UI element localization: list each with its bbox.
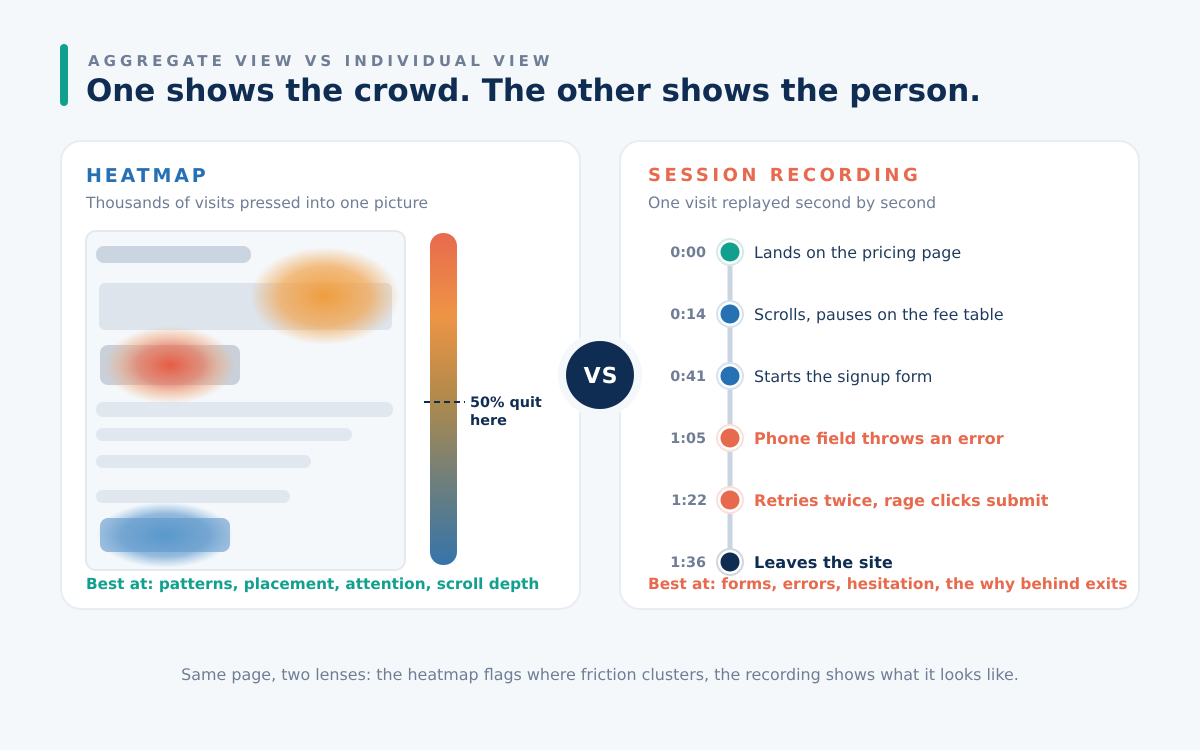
step 1:05: [670, 425, 1004, 451]
panel: heatmap: [61, 141, 580, 609]
heatmap best at: Best at: patterns, placement, attention, scroll depth: [86, 575, 539, 593]
step 1:36: Leaves the site: [754, 553, 893, 572]
50 percent label: 50% quit: [470, 395, 542, 411]
page mockup with heat blobs: [86, 231, 405, 570]
heatmap heading: HEATMAP: [86, 165, 209, 187]
step 0:14: Scrolls, pauses on the fee table: [754, 305, 1004, 324]
VS badge: VS: [584, 364, 618, 389]
header accent bar: [60, 44, 68, 106]
eyebrow heading: AGGREGATE VIEW VS INDIVIDUAL VIEW: [88, 52, 554, 70]
step 0:00: 0:00: [670, 245, 706, 261]
panel: session recording: [620, 141, 1139, 609]
hotspot: red: [104, 326, 236, 404]
title: One shows the crowd. The other shows the person.: [86, 73, 981, 109]
hotspot: orange: [250, 247, 400, 345]
session subtitle: One visit replayed second by second: [648, 193, 936, 212]
step 1:22: [671, 487, 1049, 513]
VS badge: [558, 333, 642, 417]
50 percent label: here: [470, 413, 507, 429]
step 1:22: 1:22: [671, 493, 707, 509]
session heading: SESSION RECORDING: [648, 165, 921, 186]
step 1:36: [670, 549, 893, 575]
step 1:05: Phone field throws an error: [754, 429, 1004, 448]
scroll depth bar: [430, 233, 457, 565]
step 0:41: 0:41: [670, 369, 706, 385]
step 0:00: Lands on the pricing page: [754, 243, 961, 262]
heatmap subtitle: Thousands of visits pressed into one picture: [85, 194, 428, 212]
step 0:14: 0:14: [670, 307, 706, 323]
step 0:00: [670, 239, 961, 265]
step 0:41: Starts the signup form: [754, 367, 932, 386]
step 1:36: 1:36: [670, 555, 706, 571]
50 percent marker line: [424, 401, 465, 403]
session best at: Best at: forms, errors, hesitation, the why behind exits: [648, 575, 1128, 593]
step 0:14: [670, 301, 1004, 327]
step 1:05: 1:05: [670, 431, 706, 447]
step 1:22: Retries twice, rage clicks submit: [754, 491, 1049, 510]
hotspot: blue: [97, 502, 233, 568]
footer note: Same page, two lenses: the heatmap flags where friction clusters, the recording shows what it looks like.: [181, 665, 1019, 684]
step 0:41: [670, 363, 932, 389]
timeline spine: [728, 252, 732, 562]
